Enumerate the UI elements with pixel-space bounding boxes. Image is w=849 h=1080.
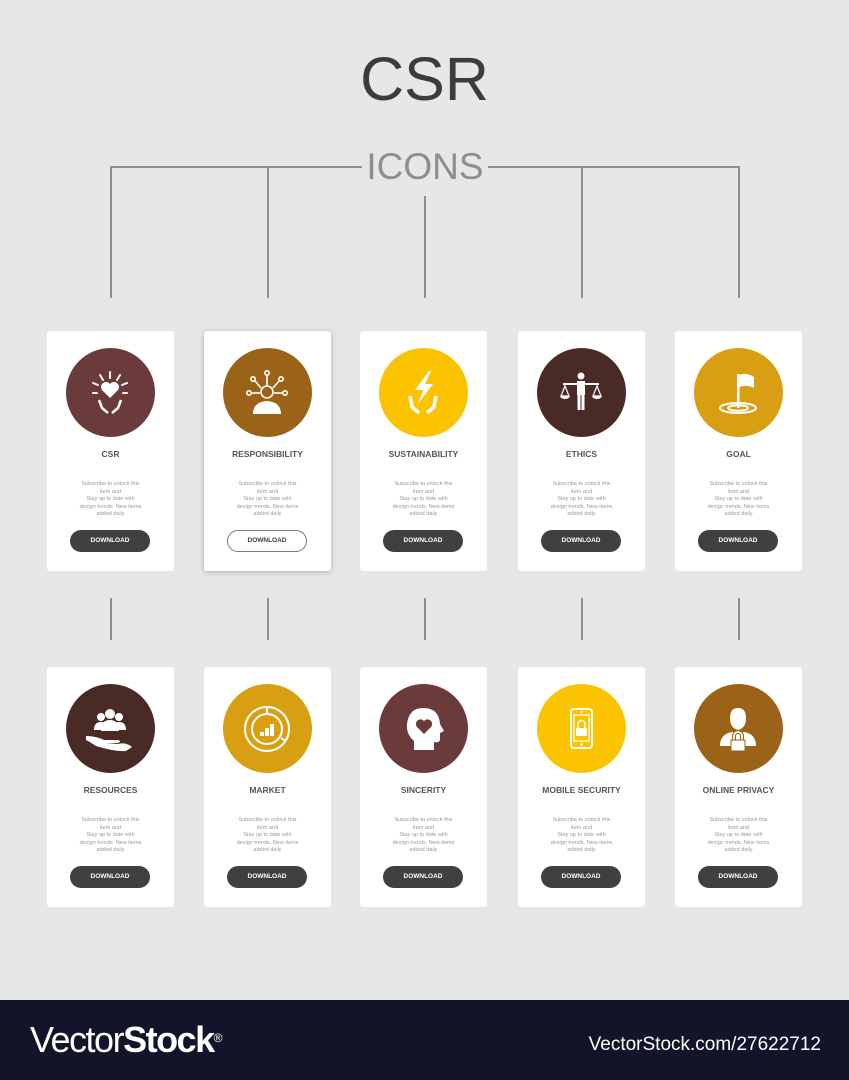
- footer bar: [0, 1000, 849, 1080]
- description: design trends. New items: [393, 840, 454, 846]
- description: item and: [571, 824, 592, 830]
- description: [550, 481, 612, 517]
- description: added daily: [96, 511, 125, 517]
- description: design trends. New items: [551, 504, 612, 510]
- card: Sincerity: [360, 667, 487, 907]
- description: Stay up to date with: [399, 832, 448, 838]
- button: [541, 530, 621, 552]
- description: added daily: [724, 847, 753, 853]
- card: Market: [204, 667, 331, 907]
- button: [698, 530, 778, 552]
- button (outline): [227, 530, 307, 552]
- icon: phone with lock: [537, 684, 626, 773]
- label: ETHICS: [566, 449, 597, 459]
- description: added daily: [96, 847, 125, 853]
- description: [236, 817, 298, 853]
- label: MOBILE SECURITY: [542, 785, 621, 795]
- description: [550, 817, 612, 853]
- button: [70, 866, 150, 888]
- description: Subscribe to unlock this: [81, 481, 140, 487]
- description: Subscribe to unlock this: [81, 817, 140, 823]
- description: item and: [413, 824, 434, 830]
- card: Responsibility: [204, 331, 331, 571]
- label: RESPONSIBILITY: [232, 449, 303, 459]
- description: [236, 481, 298, 517]
- label: ONLINE PRIVACY: [703, 785, 774, 795]
- description: Stay up to date with: [399, 496, 448, 502]
- description: Subscribe to unlock this: [394, 481, 453, 487]
- label: SUSTAINABILITY: [389, 449, 458, 459]
- description: design trends. New items: [551, 840, 612, 846]
- card: Ethics: [518, 331, 645, 571]
- button: [70, 530, 150, 552]
- description: [80, 817, 142, 853]
- description: item and: [571, 488, 592, 494]
- icon: person network: [223, 348, 312, 437]
- card: CSR: [47, 331, 174, 571]
- icon: donut chart with bars: [223, 684, 312, 773]
- description: added daily: [409, 847, 438, 853]
- description: Stay up to date with: [243, 832, 292, 838]
- description: Subscribe to unlock this: [709, 481, 768, 487]
- button: DOWNLOAD: [562, 537, 600, 544]
- description: added daily: [409, 511, 438, 517]
- button: DOWNLOAD: [90, 537, 130, 544]
- description: design trends. New items: [393, 504, 454, 510]
- connector lines: [110, 166, 740, 640]
- description: item and: [257, 824, 278, 830]
- card: Sustainability: [360, 331, 487, 571]
- description: Stay up to date with: [557, 832, 606, 838]
- title: CSR: [360, 45, 489, 113]
- subtitle: ICONS: ICONS: [366, 146, 484, 187]
- label: SINCERITY: [401, 785, 446, 795]
- description: design trends. New items: [237, 840, 298, 846]
- description: Stay up to date with: [243, 496, 292, 502]
- button: DOWNLOAD: [718, 537, 758, 544]
- icon: lightning in hands: [379, 348, 468, 437]
- description: design trends. New items: [237, 504, 298, 510]
- icon: flag on target: [694, 348, 783, 437]
- description: Stay up to date with: [86, 496, 135, 502]
- description: design trends. New items: [80, 840, 141, 846]
- description: Subscribe to unlock this: [552, 481, 611, 487]
- card: Online Privacy: [675, 667, 802, 907]
- description: added daily: [253, 511, 282, 517]
- footer logo: VectorStock®: [30, 1019, 221, 1060]
- button: [383, 866, 463, 888]
- button: DOWNLOAD: [404, 537, 442, 544]
- button: DOWNLOAD: [404, 873, 442, 880]
- description: [80, 481, 142, 517]
- icon: people on hand: [66, 684, 155, 773]
- button: DOWNLOAD: [248, 873, 286, 880]
- description: Subscribe to unlock this: [552, 817, 611, 823]
- description: Stay up to date with: [714, 832, 763, 838]
- description: item and: [413, 488, 434, 494]
- description: [392, 481, 454, 517]
- icon: person with scales: [537, 348, 626, 437]
- description: item and: [100, 488, 121, 494]
- label: CSR: [102, 449, 119, 459]
- description: Stay up to date with: [714, 496, 763, 502]
- button (outline): DOWNLOAD: [248, 537, 286, 544]
- description: item and: [257, 488, 278, 494]
- card: Goal: [675, 331, 802, 571]
- label: RESOURCES: [84, 785, 137, 795]
- icon: heart in hands: [66, 348, 155, 437]
- description: item and: [728, 824, 749, 830]
- description: Subscribe to unlock this: [238, 817, 297, 823]
- description: design trends. New items: [708, 840, 769, 846]
- button: [227, 866, 307, 888]
- description: added daily: [567, 847, 596, 853]
- description: Stay up to date with: [86, 832, 135, 838]
- label: MARKET: [249, 785, 286, 795]
- description: added daily: [253, 847, 282, 853]
- button: DOWNLOAD: [718, 873, 758, 880]
- description: Subscribe to unlock this: [238, 481, 297, 487]
- button: DOWNLOAD: [90, 873, 130, 880]
- icon: head with heart: [379, 684, 468, 773]
- label: GOAL: [726, 449, 751, 459]
- card: Mobile Security: [518, 667, 645, 907]
- button: [383, 530, 463, 552]
- description: Subscribe to unlock this: [709, 817, 768, 823]
- description: Subscribe to unlock this: [394, 817, 453, 823]
- description: design trends. New items: [708, 504, 769, 510]
- button: [698, 866, 778, 888]
- description: design trends. New items: [80, 504, 141, 510]
- description: item and: [100, 824, 121, 830]
- description: added daily: [724, 511, 753, 517]
- footer url: VectorStock.com/27622712: [589, 1034, 821, 1055]
- card: Resources: [47, 667, 174, 907]
- description: [392, 817, 454, 853]
- button: DOWNLOAD: [562, 873, 600, 880]
- description: item and: [728, 488, 749, 494]
- description: [708, 481, 770, 517]
- description: [708, 817, 770, 853]
- icon: person with lock: [694, 684, 783, 773]
- description: Stay up to date with: [557, 496, 606, 502]
- button: [541, 866, 621, 888]
- description: added daily: [567, 511, 596, 517]
